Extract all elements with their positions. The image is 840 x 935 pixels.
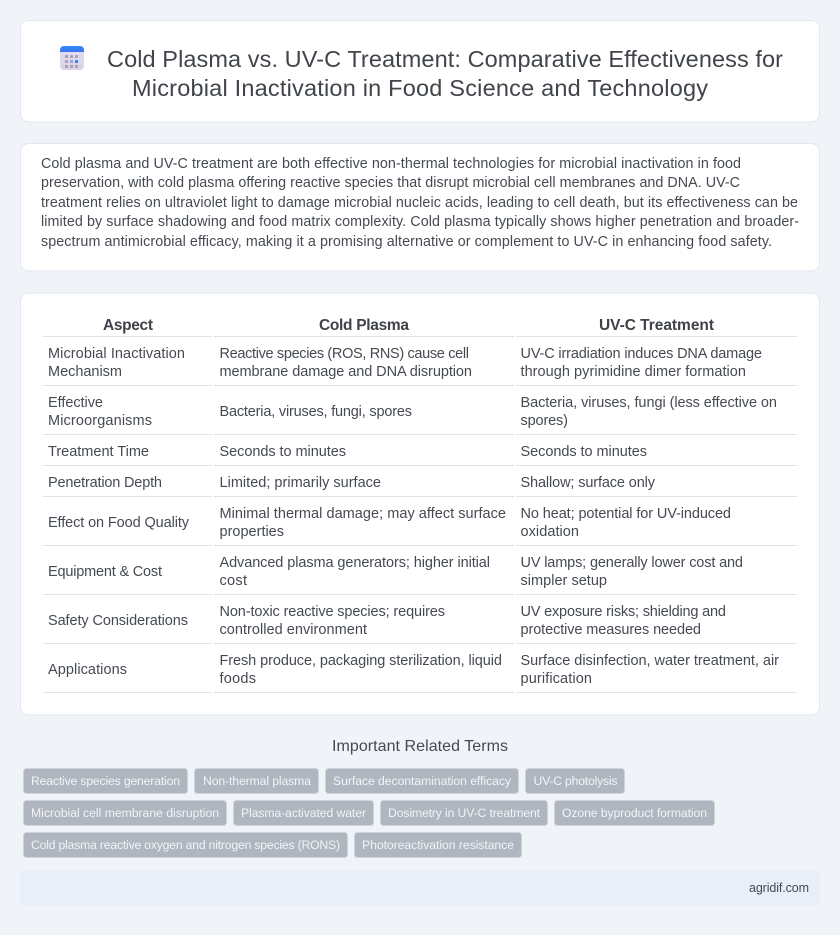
row: treatment time: Seconds to minutes <box>520 444 647 460</box>
row: effect on food quality: oxidation <box>520 524 579 540</box>
table header row: Cold Plasma <box>319 317 409 334</box>
text block: intro paragraph: limited by surface shadowing and food matrix complexity. Cold plasma typically shows higher penetration and broader- <box>41 214 799 230</box>
row: penetration depth: Penetration Depth <box>48 475 162 491</box>
row: treatment time <box>48 444 647 460</box>
panel: introduction <box>20 144 820 271</box>
heading: important related terms: Important Related Terms <box>332 738 508 755</box>
row: effect on food quality: Effect on Food Quality <box>48 515 190 531</box>
table header row: UV-C Treatment <box>599 317 714 334</box>
row: effective microorganisms: Microorganisms <box>48 413 152 429</box>
tag: Ozone byproduct formation <box>562 806 707 820</box>
title <box>107 46 783 101</box>
table header row <box>103 317 714 334</box>
row: effective microorganisms: Effective <box>48 395 103 411</box>
icon: calendar <box>60 46 84 70</box>
row: applications: Surface disinfection, water treatment, air <box>520 653 779 669</box>
tag: Non-thermal plasma <box>203 774 311 788</box>
tag <box>354 832 522 858</box>
row: equipment and cost: cost <box>220 573 247 589</box>
tag: Plasma-activated water <box>241 806 366 820</box>
text block: intro paragraph: preservation, with cold plasma offering reactive species that disrupt microbial cell membranes and DNA. UV-C <box>41 175 740 191</box>
table header row: Aspect <box>103 317 153 334</box>
tag: Photoreactivation resistance <box>362 838 514 852</box>
row: treatment time: Seconds to minutes <box>220 444 346 460</box>
row: safety considerations <box>48 604 726 638</box>
panel: comparison table <box>20 293 820 715</box>
tag <box>24 768 188 794</box>
title: Microbial Inactivation in Food Science and Technology <box>132 75 708 101</box>
row: effect on food quality: properties <box>220 524 284 540</box>
row: equipment and cost: UV lamps; generally lower cost and <box>520 555 743 571</box>
tag <box>526 768 624 794</box>
row: safety considerations: UV exposure risks; shielding and <box>520 604 726 620</box>
title: Cold Plasma vs. UV-C Treatment: Comparative Effectiveness for <box>107 46 783 72</box>
row: applications: Fresh produce, packaging sterilization, liquid <box>220 653 502 669</box>
row: microbial inactivation mechanism: membrane damage and DNA disruption <box>220 364 472 380</box>
footer: agridif.com <box>749 881 809 895</box>
tag: Reactive species generation <box>31 774 180 788</box>
row: penetration depth <box>48 475 656 491</box>
panel: header <box>20 20 820 122</box>
row: microbial inactivation mechanism: Mechanism <box>48 364 122 380</box>
row: safety considerations: Non-toxic reactive species; requires <box>220 604 445 620</box>
row: applications: purification <box>520 671 592 687</box>
row: safety considerations: protective measures needed <box>520 622 701 638</box>
text block: intro paragraph <box>41 156 799 250</box>
row: applications: foods <box>220 671 256 687</box>
tag: Surface decontamination efficacy <box>333 774 512 788</box>
row: applications <box>48 653 779 687</box>
tag: Dosimetry in UV-C treatment <box>388 806 541 820</box>
tag <box>194 768 318 794</box>
tag <box>24 800 226 826</box>
row: effect on food quality: No heat; potential for UV-induced <box>520 506 731 522</box>
row: microbial inactivation mechanism <box>48 346 762 380</box>
row: equipment and cost: Advanced plasma generators; higher initial <box>220 555 490 571</box>
tag <box>380 800 548 826</box>
tag <box>326 768 518 794</box>
row: applications: Applications <box>48 662 127 678</box>
row: effect on food quality <box>48 506 731 540</box>
row: effective microorganisms: Bacteria, viruses, fungi (less effective on <box>520 395 777 411</box>
row: effect on food quality: Minimal thermal damage; may affect surface <box>220 506 506 522</box>
tag: Microbial cell membrane disruption <box>31 806 219 820</box>
row: effective microorganisms: Bacteria, viruses, fungi, spores <box>220 404 412 420</box>
row: equipment and cost <box>48 555 743 589</box>
text block: intro paragraph: spectrum antimicrobial efficacy, making it a promising alternative or complement to UV-C in enhancing food safety. <box>41 234 772 250</box>
tag <box>554 800 714 826</box>
tag: UV-C photolysis <box>534 774 618 788</box>
row: microbial inactivation mechanism: through pyrimidine dimer formation <box>520 364 746 380</box>
row: effective microorganisms: spores) <box>520 413 568 429</box>
tag <box>234 800 374 826</box>
row: equipment and cost: Equipment & Cost <box>48 564 162 580</box>
panel: related term tags <box>24 768 714 858</box>
row: safety considerations: controlled environment <box>220 622 367 638</box>
row: penetration depth: Limited; primarily surface <box>220 475 381 491</box>
row: treatment time: Treatment Time <box>48 444 149 460</box>
row: equipment and cost: simpler setup <box>520 573 607 589</box>
row: safety considerations: Safety Considerations <box>48 613 188 629</box>
text block: intro paragraph: Cold plasma and UV-C treatment are both effective non-thermal technologies for microbial inactivation in food <box>41 156 741 172</box>
tag <box>24 832 348 858</box>
row: microbial inactivation mechanism: UV-C irradiation induces DNA damage <box>520 346 762 362</box>
footer <box>20 871 820 905</box>
row: microbial inactivation mechanism: Microbial Inactivation <box>48 346 185 362</box>
row: effective microorganisms <box>48 395 777 429</box>
tag: Cold plasma reactive oxygen and nitrogen species (RONS) <box>31 838 340 852</box>
text block: intro paragraph: treatment relies on ultraviolet light to damage microbial nucleic acids, leading to cell death, but its effectiveness can be <box>41 195 798 211</box>
row: penetration depth: Shallow; surface only <box>520 475 656 491</box>
row: microbial inactivation mechanism: Reactive species (ROS, RNS) cause cell <box>220 346 469 362</box>
